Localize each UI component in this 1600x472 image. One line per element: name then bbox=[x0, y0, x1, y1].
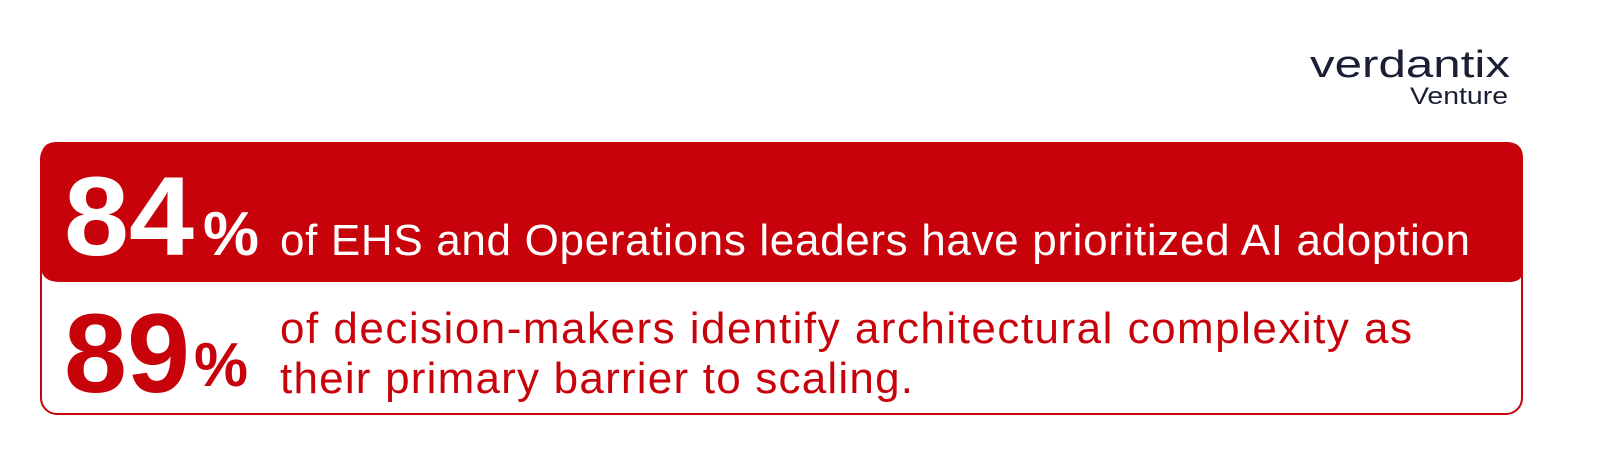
stat text 2: of decision-makers identify architectural complexity as bbox=[280, 304, 1412, 353]
stat number 84% bbox=[64, 154, 259, 279]
stat number 89%: 89 bbox=[64, 291, 190, 416]
stat number 84%: % bbox=[203, 200, 259, 269]
stat text 2 bbox=[280, 304, 1412, 403]
stat text 2: their primary barrier to scaling. bbox=[280, 354, 913, 403]
logo: verdantix Venture: Venture bbox=[1410, 83, 1508, 110]
stat number 84%: 84 bbox=[64, 154, 194, 279]
logo: verdantix Venture bbox=[1310, 44, 1510, 110]
stat number 89%: % bbox=[194, 331, 248, 400]
logo: verdantix Venture: verdantix bbox=[1310, 44, 1510, 86]
panel: red header stat bbox=[41, 142, 1523, 282]
panel: stats card bbox=[41, 142, 1523, 416]
stat text 1: of EHS and Operations leaders have prioritized AI adoption bbox=[280, 216, 1470, 265]
stat number 89% bbox=[64, 291, 248, 416]
